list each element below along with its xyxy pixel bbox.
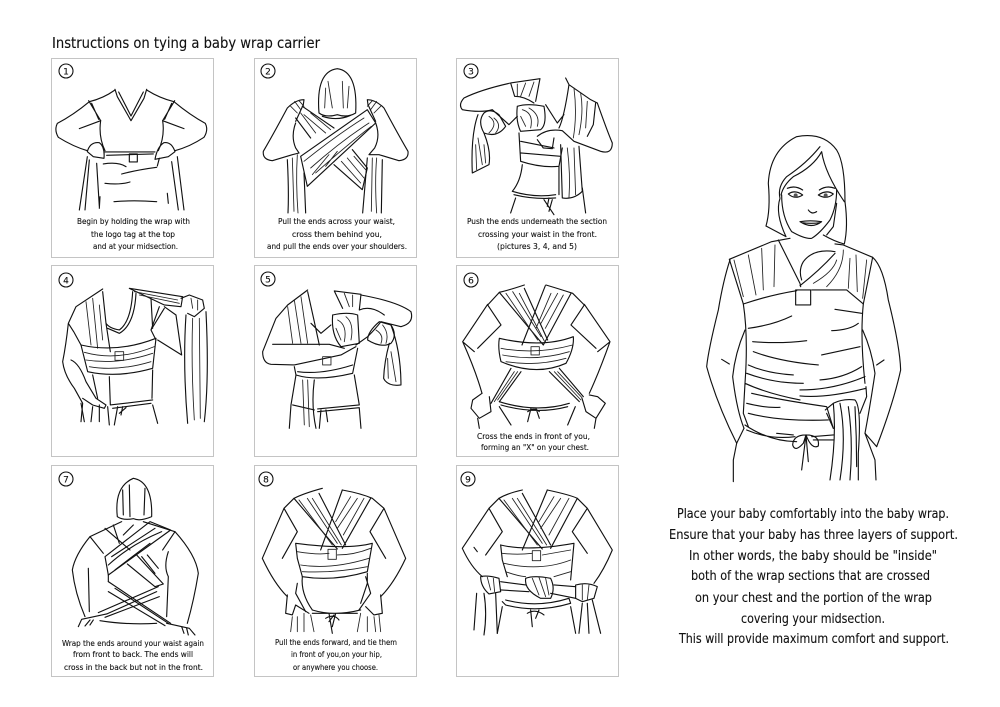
panel: step 6 [456,266,618,456]
panel: step 5 [254,266,416,456]
step number 7: 7 [63,476,69,486]
step number 4 [59,273,73,287]
illustration: finished knot at the waist [462,490,612,635]
text block: final instructions: on your chest and the portion of the wrap [695,590,932,606]
caption step 1: the logo tag at the top [91,230,175,239]
caption step 7 [62,639,204,672]
illustration: holding the wrap at midsection [56,89,207,210]
illustration: pushing ends under the waist section [460,78,612,215]
face [782,187,837,238]
step number 3: 3 [468,68,474,78]
panel: step 2 [254,58,416,258]
illustration: crossing the wrap behind the back [263,69,408,213]
illustration: pulling the end under the wrap [63,288,207,425]
step number 9 [461,472,475,486]
step number 6 [464,273,478,287]
panel: step 9 [456,466,618,676]
step number 1 [59,64,73,78]
caption step 7: Wrap the ends around your waist again [62,639,204,648]
caption step 7: cross in the back but not in the front. [64,663,203,672]
text block: final instructions: In other words, the baby should be "inside" [689,548,937,564]
step number 1: 1 [63,68,69,78]
text block: final instructions: both of the wrap sections that are crossed [691,568,930,584]
step number 9: 9 [465,476,471,486]
step number 5 [261,272,275,286]
panel: step 3 [456,58,618,258]
caption step 2: Pull the ends across your waist, [278,217,395,226]
step number 8 [259,472,273,486]
illustration: pushing end under the waist section [263,290,412,428]
caption step 6 [477,432,590,452]
panel: step 8 [254,466,416,676]
illustration: woman wearing baby in the wrap [707,136,901,482]
caption step 8: Pull the ends forward, and tie them [275,638,397,647]
title: Instructions on tying a baby wrap carrier [52,34,321,52]
step number 2 [261,64,275,78]
caption step 2 [267,217,407,251]
caption step 1: and at your midsection. [93,242,178,251]
step number 8: 8 [263,476,269,486]
caption step 1 [77,217,190,251]
illustration: ends crossed in an X on the chest [463,285,610,428]
step number 4: 4 [63,276,69,286]
panel: step 7 [52,466,214,676]
step number 6: 6 [468,276,474,286]
panel: step 1 [52,58,214,258]
caption step 1: Begin by holding the wrap with [77,217,190,226]
tie and hanging wrap end [737,400,877,480]
caption step 8: or anywhere you choose. [293,663,378,672]
caption step 3: Push the ends underneath the section [467,217,607,226]
step number 7 [59,472,73,486]
wrap across the torso [743,304,867,428]
text block: final instructions: covering your midsection. [741,611,885,627]
caption step 2: cross them behind you, [292,230,382,239]
caption step 3: crossing your waist in the front. [478,230,597,239]
text block: final instructions [669,506,958,647]
illustration: wrapping ends around the waist from the back [72,478,198,635]
step number 5: 5 [265,276,271,286]
wrap on the shoulders [729,238,873,305]
caption step 3: (pictures 3, 4, and 5) [497,242,577,251]
step number 2: 2 [265,68,271,78]
caption step 8 [275,638,397,672]
panel: step 4 [52,266,214,456]
step number 3 [464,64,478,78]
caption step 6: forming an "X" on your chest. [481,443,589,452]
caption step 7: from front to back. The ends will [73,650,193,659]
text block: final instructions: This will provide maximum comfort and support. [678,631,949,647]
caption step 6: Cross the ends in front of you, [477,432,590,441]
caption step 3 [467,217,607,251]
text block: final instructions: Place your baby comfortably into the baby wrap. [677,506,949,522]
caption step 2: and pull the ends over your shoulders. [267,242,407,251]
hair [766,136,846,244]
caption step 8: in front of you,on your hip, [291,650,382,659]
arms [707,257,901,482]
illustration: pulling the ends forward and tying [262,488,406,633]
